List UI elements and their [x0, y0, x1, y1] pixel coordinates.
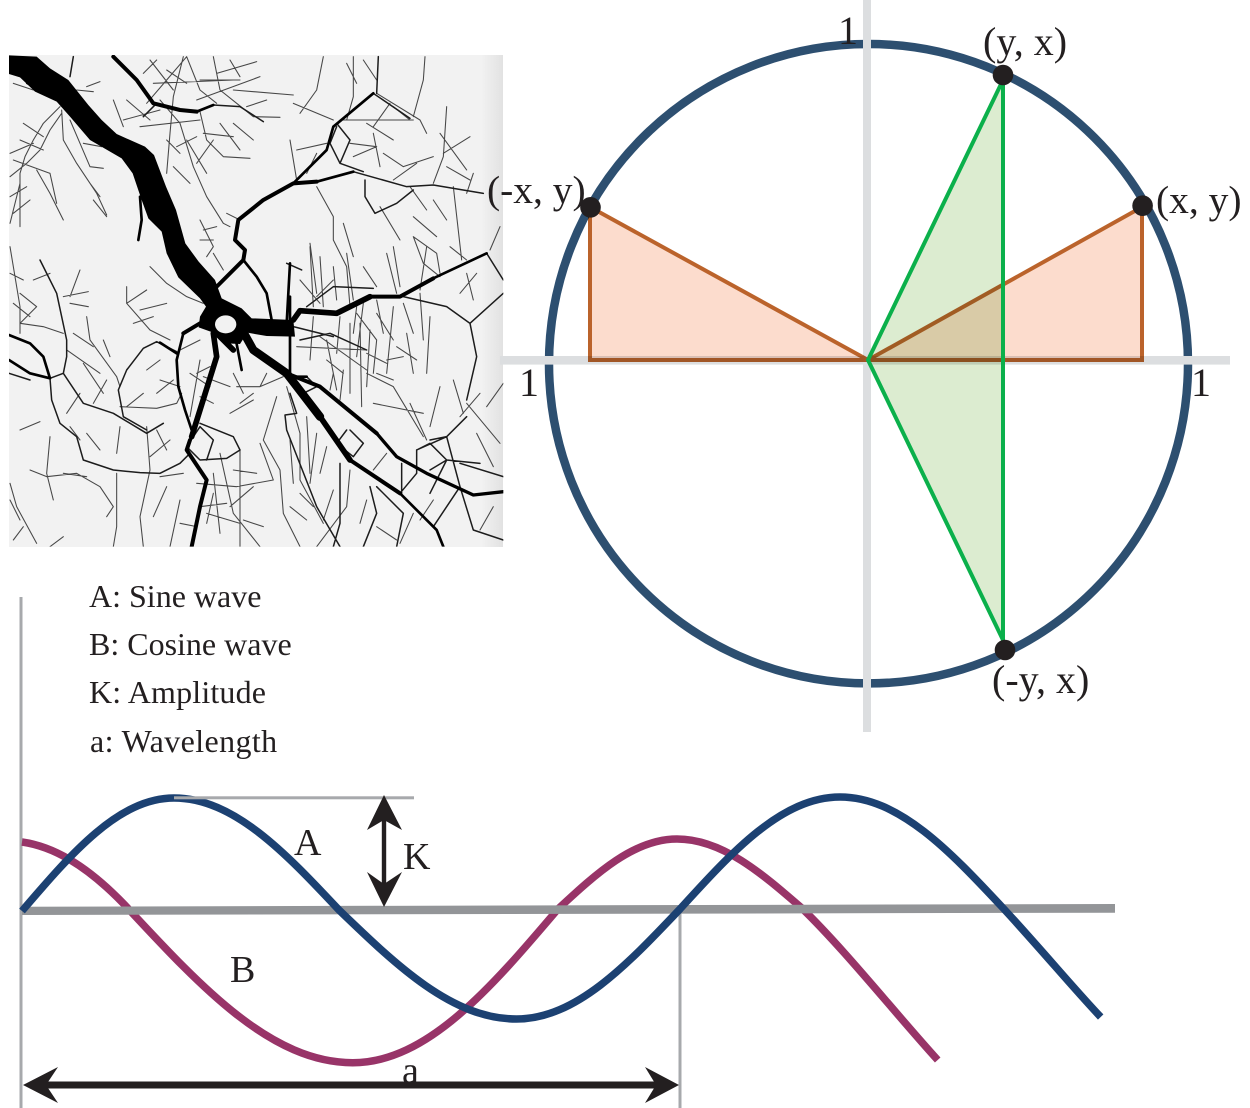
legend text: A: Sine wave [89, 578, 261, 614]
axis labels [519, 8, 1211, 405]
axis labels: 1 [1191, 360, 1211, 405]
photo: branching tree silhouette [9, 55, 503, 547]
left vertical guide [20, 597, 22, 1108]
orange triangles [590, 207, 1142, 360]
point markers [580, 65, 1153, 660]
amplitude top guide [174, 796, 414, 799]
arrow: wavelength a [23, 1067, 679, 1103]
wave chart [20, 597, 1115, 1108]
horizontal baseline [22, 904, 1115, 915]
label B: B [230, 949, 255, 991]
label a: a [402, 1050, 419, 1092]
right vertical guide [678, 912, 682, 1108]
circle outline [549, 44, 1188, 683]
coordinate label: (x, y): (x, y) [1156, 178, 1242, 222]
sine wave A [22, 797, 1101, 1019]
legend text: K: Amplitude [89, 674, 266, 710]
green triangles [868, 80, 1003, 640]
legend text: B: Cosine wave [89, 626, 292, 662]
trunk silhouette [9, 55, 295, 344]
unit circle diagram [487, 0, 1242, 732]
label A: A [294, 822, 322, 864]
coordinate label: (y, x): (y, x) [983, 19, 1067, 64]
axis labels: 1 [838, 8, 858, 53]
legend text: a: Wavelength [90, 723, 278, 759]
axis labels: 1 [519, 360, 539, 405]
green triangle outline [868, 80, 1003, 640]
horizontal axis [500, 356, 1230, 365]
coordinate label: (-y, x): (-y, x) [992, 657, 1089, 702]
vertical axis [863, 0, 871, 732]
arrow: amplitude K [367, 795, 402, 907]
coordinate label: (-x, y): (-x, y) [487, 168, 586, 212]
cosine wave B [22, 839, 938, 1063]
legend text [89, 578, 292, 759]
label K: K [403, 836, 431, 878]
